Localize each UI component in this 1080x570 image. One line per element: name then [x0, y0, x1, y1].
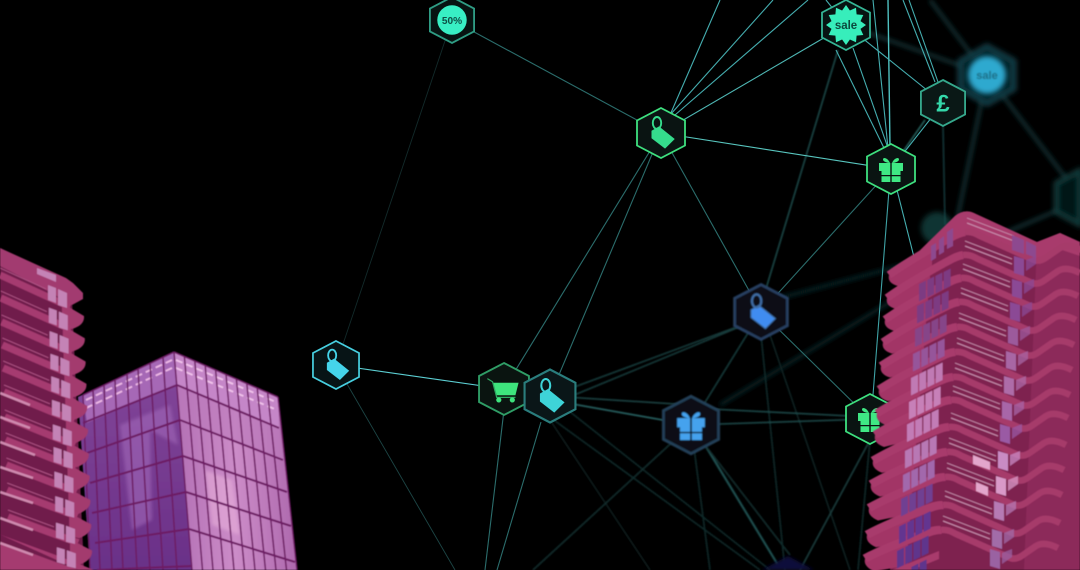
right block right side floors [941, 218, 1080, 559]
network connection lines [336, 0, 1075, 570]
right wing shade [1024, 233, 1080, 570]
crisp dim lines [452, 20, 891, 570]
node: sale badge: sale [835, 20, 857, 32]
right block centre windows [990, 256, 1036, 569]
node: blue price tag [735, 284, 787, 340]
node: pound sign [921, 80, 965, 126]
building: left apartment block [0, 248, 94, 570]
faint lines [336, 20, 455, 570]
right block left side floors [865, 232, 965, 570]
left block roof [0, 248, 83, 305]
blurred mid lines [533, 50, 945, 570]
reflections [120, 385, 283, 535]
node: sale badge [822, 0, 870, 50]
node: 50% badge [430, 0, 474, 43]
right block body [890, 211, 1080, 570]
node: teal price tag [525, 370, 575, 422]
right block roof [908, 211, 1080, 266]
dim wide lines [720, 0, 1075, 405]
node: green shopping cart [479, 363, 529, 415]
building: glass tower [78, 352, 297, 570]
node: blue gift [663, 396, 719, 454]
node: cyan price tag [313, 341, 359, 389]
right block left windows [897, 268, 951, 570]
node: blurred sale badge: sale [976, 70, 998, 82]
lit window patches [973, 455, 990, 496]
bright lines [336, 0, 943, 395]
node: green gift beside building [846, 394, 894, 444]
left block body [0, 248, 84, 570]
node: green price tag [637, 108, 685, 158]
node: blurred sale badge [960, 46, 1014, 104]
left block floors [0, 268, 94, 570]
glass tower left face [78, 352, 192, 570]
building: right apartment block [865, 211, 1080, 570]
left block windows [37, 268, 76, 570]
right block roof windows [931, 228, 1036, 261]
node: pound sign: £ [936, 90, 950, 117]
node: 50% badge: 50% [442, 16, 462, 27]
lit balcony strips [0, 393, 35, 555]
mullions [83, 352, 297, 570]
node: blurred far-right hexagon [1056, 170, 1080, 225]
parapet grid [83, 352, 279, 428]
node: blue hexagon at bottom edge [762, 556, 814, 570]
glass tower right face [174, 352, 297, 570]
node: green gift [867, 144, 915, 194]
node: glow behind right building [921, 212, 953, 244]
